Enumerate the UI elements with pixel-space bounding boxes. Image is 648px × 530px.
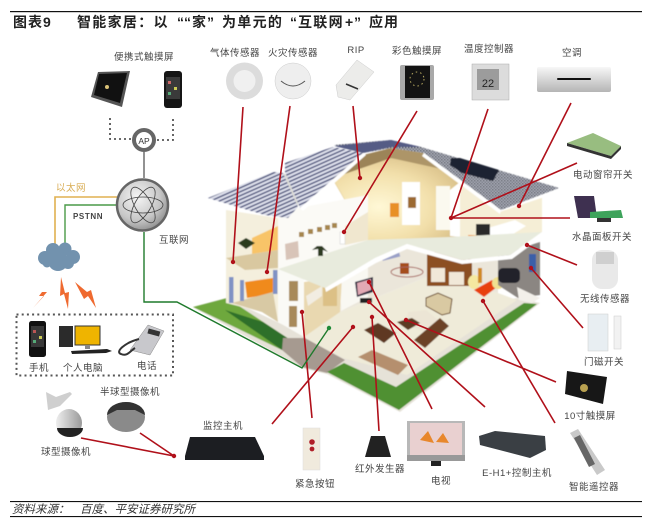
- label: 个人电脑: 个人电脑: [63, 362, 103, 374]
- icon: 10 inch touch screen: [565, 371, 607, 404]
- icon: air conditioner: [537, 67, 611, 92]
- labels: 监控主机: [203, 420, 243, 432]
- icon: temperature controller: 22: [482, 78, 494, 90]
- title: 应用: [369, 14, 399, 30]
- icon: tablet: [91, 71, 130, 107]
- icon: RIP sensor: [336, 60, 374, 100]
- icon: ball camera: [46, 392, 83, 437]
- icon: control host: [479, 431, 546, 458]
- icon: AP node: [134, 130, 154, 150]
- labels: 彩色触摸屏: [392, 45, 442, 57]
- labels: 10寸触摸屏: [564, 410, 616, 422]
- labels: 火灾传感器: [268, 47, 318, 59]
- labels: 红外发生器: [355, 463, 405, 475]
- icon: signal bolts: [33, 277, 96, 309]
- icon: infrared generator: [365, 436, 391, 457]
- network lines: [55, 118, 331, 368]
- icon: gas sensor: [226, 62, 263, 100]
- lower-left room: [226, 210, 278, 322]
- icon: personal computer: [59, 326, 112, 354]
- labels: E-H1+控制主机: [482, 467, 552, 479]
- icon: temperature controller: [472, 64, 509, 100]
- labels: 温度控制器: [464, 43, 514, 55]
- labels: 门磁开关: [584, 356, 624, 368]
- front lawn and base: [193, 298, 540, 412]
- icon: dome camera: [107, 402, 145, 432]
- labels: [41, 43, 633, 493]
- left and dormer roof: [208, 147, 366, 218]
- labels: 空调: [562, 47, 582, 59]
- icon: TV: [407, 421, 465, 466]
- icon: curtain switch: [567, 133, 621, 159]
- title: ”: [354, 14, 361, 30]
- labels: 球型摄像机: [41, 446, 91, 458]
- icon: telephone: [119, 325, 164, 355]
- panel: terminal devices: [16, 314, 173, 376]
- ground floor room: [303, 242, 540, 375]
- upper floor: [330, 148, 542, 244]
- label: 手机: 手机: [29, 362, 49, 374]
- title: +: [345, 14, 353, 30]
- icon: monitor host: [185, 437, 264, 460]
- labels: PSTNN: [73, 212, 103, 221]
- labels: 无线传感器: [580, 293, 630, 305]
- title: ““: [177, 14, 191, 30]
- label: 电话: 电话: [137, 360, 157, 372]
- icon: smartphone: [164, 71, 182, 108]
- labels: 便携式触摸屏: [114, 51, 174, 63]
- icon: emergency button: [303, 428, 320, 470]
- title: 为单元的: [222, 14, 283, 30]
- title: [10, 11, 642, 30]
- icon: door contact: [588, 314, 621, 351]
- title: “: [290, 14, 297, 30]
- icon: fire sensor: [275, 63, 311, 99]
- title: 家: [192, 14, 206, 30]
- icon: AP node: AP: [138, 136, 150, 146]
- right roof: [334, 140, 559, 214]
- icon: wireless sensor: [592, 250, 618, 289]
- labels: 水晶面板开关: [572, 231, 632, 243]
- icon: crystal panel switch: [574, 196, 623, 222]
- icon: color touch screen: [400, 65, 434, 100]
- house illustration: [193, 140, 559, 412]
- labels: 以太网: [56, 182, 86, 194]
- lower left white block: [278, 269, 342, 337]
- title: 互联网: [298, 14, 344, 30]
- labels: 气体传感器: [210, 47, 260, 59]
- red connector lines: [81, 103, 583, 458]
- labels: 电动窗帘开关: [573, 169, 633, 181]
- icon: remote control: [570, 429, 605, 475]
- title: 图表9: [13, 14, 52, 30]
- labels: 电视: [431, 475, 451, 487]
- white wall with pictures: [278, 195, 368, 269]
- title: 智能家居：以: [77, 14, 169, 30]
- labels: 半球型摄像机: [100, 386, 160, 398]
- source footer: 百度、平安证券研究所: [80, 503, 196, 516]
- icon: internet globe: [117, 180, 168, 230]
- upper floor slab: [278, 232, 543, 292]
- icon: cloud: [38, 242, 80, 271]
- labels: 互联网: [159, 235, 189, 246]
- labels: 紧急按钮: [295, 478, 335, 490]
- source footer: 资料来源：: [12, 504, 70, 516]
- source footer: [10, 501, 642, 517]
- labels: 智能遥控器: [569, 481, 619, 493]
- labels: RIP: [347, 45, 365, 56]
- title: ”: [207, 14, 214, 30]
- icon: mobile phone: [29, 321, 46, 357]
